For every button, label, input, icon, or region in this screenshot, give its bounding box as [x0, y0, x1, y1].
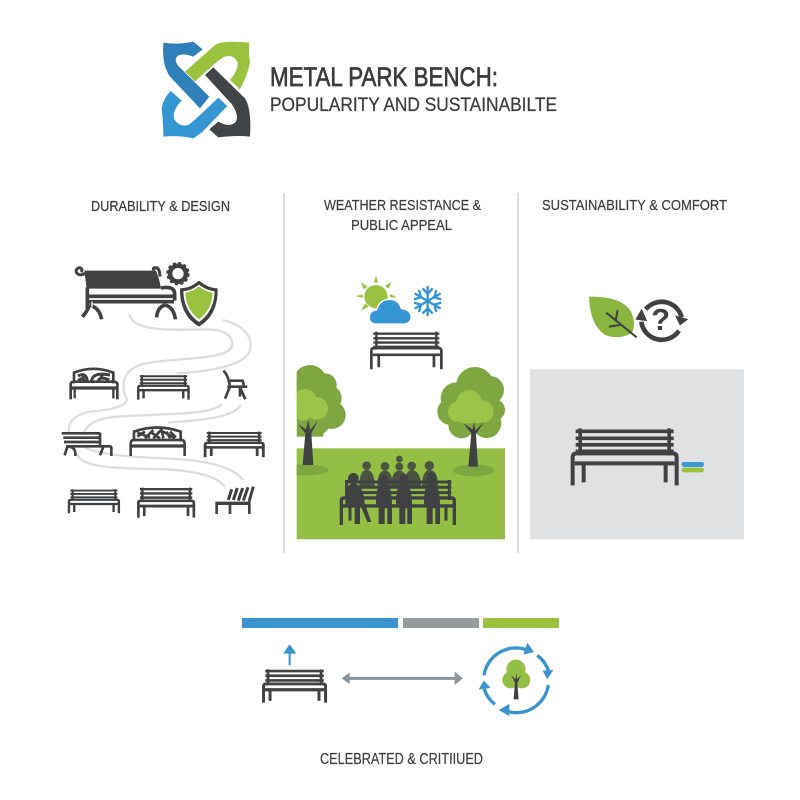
- icon: sustainability cycle with tree: [479, 643, 553, 716]
- material swatches: [682, 462, 704, 472]
- title: METAL PARK BENCH:: [270, 62, 498, 92]
- icon: snowflake: [414, 286, 441, 316]
- tree: right: [437, 367, 505, 476]
- bench: side view left: [62, 433, 111, 456]
- icon: recycle with question mark: ?: [651, 303, 670, 337]
- subtitle: POPULARITY AND SUSTAINABILTE: [270, 94, 557, 116]
- icon: shield: [180, 281, 218, 327]
- bench: modern with side table: [217, 487, 253, 514]
- bench: side chair: [223, 371, 247, 399]
- heading: durability and design: DURABILITY & DESIGN: [91, 199, 230, 215]
- bench: comfort: [573, 428, 677, 485]
- icon: gear: [168, 263, 188, 284]
- conclusion label: CELEBRATED & CRITIIUED: [320, 751, 483, 768]
- icon: cloud: [369, 299, 411, 324]
- group of people on a bench: [341, 456, 454, 525]
- bench: ornate one: [71, 369, 117, 399]
- bench: popularity: [264, 669, 326, 703]
- tree: left: [296, 365, 346, 476]
- winding paths: [69, 314, 251, 487]
- bench: low slatted: [69, 489, 119, 513]
- main ornate bench: [76, 268, 175, 319]
- panel: sustainability and comfort: [530, 297, 744, 539]
- panel: durability and design: [62, 263, 263, 518]
- bench: on plinth: [371, 332, 441, 369]
- icon: sun: [355, 275, 397, 311]
- bench: wide slatted: [205, 432, 263, 457]
- heading: weather resistance and public appeal: [324, 198, 481, 234]
- heading: weather resistance and public appeal: WEATHER RESISTANCE &: [324, 198, 481, 214]
- panel: weather resistance and public appeal: [278, 275, 505, 539]
- lawn: [297, 448, 505, 539]
- bench: ornate two: [131, 427, 185, 456]
- arrow: two-way comparison: [342, 672, 462, 684]
- icon: recycle with question mark: [636, 302, 688, 340]
- bench: tall slatted: [138, 488, 194, 518]
- icon: leaf: [589, 297, 637, 337]
- heading: weather resistance and public appeal: PUBLIC APPEAL: [351, 218, 452, 234]
- arrow: popularity up: [285, 646, 294, 665]
- stacked proportion bar: [242, 618, 559, 628]
- heading: sustainability and comfort: SUSTAINABILITY & COMFORT: [542, 198, 727, 214]
- bench: slatted: [138, 375, 189, 400]
- comfort card: [530, 369, 744, 539]
- comparison row: [264, 643, 553, 716]
- logo: [162, 42, 250, 138]
